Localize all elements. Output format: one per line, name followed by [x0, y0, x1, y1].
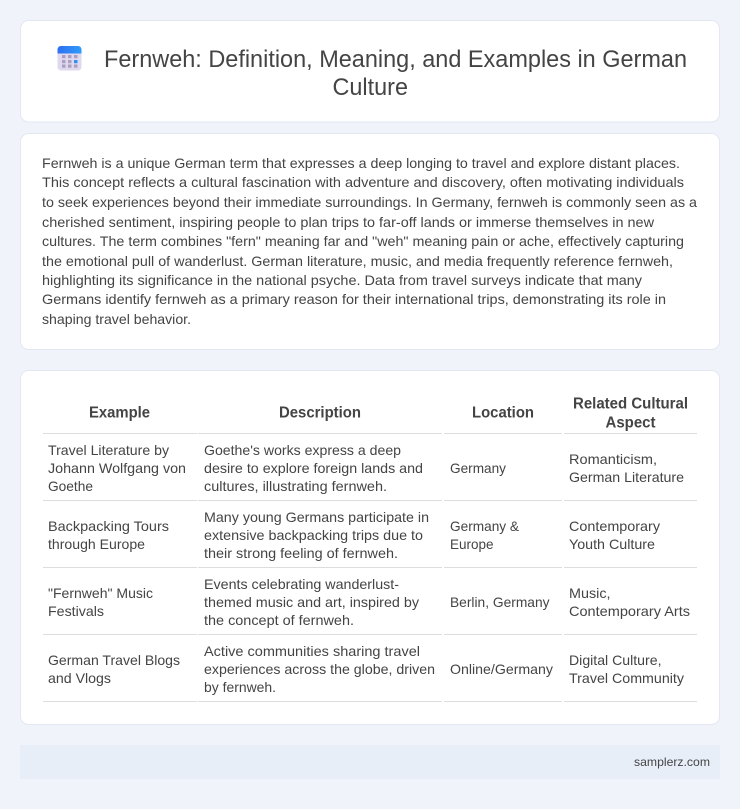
table header row: Example [89, 405, 150, 422]
title [104, 46, 687, 101]
footer bar [20, 745, 720, 779]
table row: Goethe: Goethe [48, 478, 93, 494]
text block: fernweh description: cherished sentiment, inspiring people to plan trips to far-off lands or immerse themselves in new [42, 214, 655, 230]
table row: blogs and vlogs: Online/Germany [450, 661, 553, 677]
table header row: Description [279, 405, 361, 422]
table row: music festivals: Events celebrating wanderlust- [204, 576, 399, 592]
title: Fernweh: Definition, Meaning, and Examples in German [104, 46, 687, 73]
table row: blogs and vlogs: Active communities sharing travel [204, 643, 420, 659]
table header row [89, 396, 688, 432]
table row: blogs and vlogs: and Vlogs [48, 670, 111, 686]
table row: blogs and vlogs [48, 643, 684, 695]
table row: Goethe: Travel Literature by [48, 442, 169, 458]
text block: fernweh description: cultures. The term combines "fern" meaning far and "weh" meaning pain or ache, effectively capturing [42, 233, 684, 249]
text block: fernweh description [42, 155, 697, 327]
table row: backpacking [48, 509, 660, 561]
text block: fernweh description: shaping travel behavior. [42, 311, 191, 327]
table row: music festivals: themed music and art, inspired by [204, 594, 419, 610]
table row: backpacking: Germany & [450, 518, 520, 534]
table row: backpacking: Backpacking Tours [48, 518, 169, 534]
table row: music festivals [48, 576, 690, 628]
table row: Goethe: Johann Wolfgang von [48, 460, 186, 476]
table row: music festivals: Festivals [48, 603, 104, 619]
table row: blogs and vlogs: by fernweh. [204, 679, 276, 695]
table row: Goethe: Germany [450, 460, 506, 476]
text block: fernweh description: Fernweh is a unique German term that expresses a deep longing to travel and explore distant places. [42, 155, 680, 171]
text block: fernweh description: highlighting its significance in the national psyche. Data from travel surveys indicate that many [42, 272, 642, 288]
panel: introduction text [20, 134, 720, 350]
table row: blogs and vlogs: German Travel Blogs [48, 652, 180, 668]
text block: fernweh description: the emotional pull of wanderlust. German literature, music, and media frequently reference fernweh, [42, 253, 673, 269]
panel: examples table [20, 370, 720, 724]
text block: fernweh description: to seek experiences beyond their immediate surroundings. In Germany, fernweh is commonly seen as a [42, 194, 697, 210]
table row: blogs and vlogs: experiences across the globe, driven [204, 661, 435, 677]
table row: Goethe: German Literature [569, 469, 684, 485]
table header row: Related Cultural [573, 396, 688, 413]
panel: title card [20, 20, 720, 122]
table row: backpacking: through Europe [48, 536, 145, 552]
table row: Goethe: desire to explore foreign lands and [204, 460, 423, 476]
table row: backpacking: Many young Germans participate in [204, 509, 429, 525]
text block: fernweh description: Germans identify fernweh as a primary reason for their international trips, demonstrating its role in [42, 291, 666, 307]
table row: music festivals: Berlin, Germany [450, 594, 550, 610]
table row: music festivals: the concept of fernweh. [204, 612, 354, 628]
table row: music festivals: "Fernweh" Music [48, 585, 153, 601]
table row: backpacking: Contemporary [569, 518, 660, 534]
table header row: Aspect [606, 415, 656, 432]
table row: Goethe: cultures, illustrating fernweh. [204, 478, 387, 494]
text block: fernweh description: This concept reflects a cultural fascination with adventure and discovery, often motivating individuals [42, 174, 684, 190]
table row: backpacking: Europe [450, 536, 494, 552]
table row: Goethe [48, 442, 684, 494]
table header row: Location [472, 405, 534, 422]
table row: blogs and vlogs: Digital Culture, [569, 652, 662, 668]
footer source text: samplerz.com [634, 755, 710, 769]
table row: backpacking: Youth Culture [569, 536, 655, 552]
title: Culture [332, 74, 408, 101]
table row: music festivals: Music, [569, 585, 610, 601]
icon: calendar [58, 46, 82, 70]
table row: backpacking: their strong feeling of fernweh. [204, 545, 398, 561]
table row: Goethe: Romanticism, [569, 451, 657, 467]
table row: music festivals: Contemporary Arts [569, 603, 690, 619]
table row: blogs and vlogs: Travel Community [569, 670, 684, 686]
table row: backpacking: extensive backpacking trips due to [204, 527, 423, 543]
table row: Goethe: Goethe's works express a deep [204, 442, 401, 458]
